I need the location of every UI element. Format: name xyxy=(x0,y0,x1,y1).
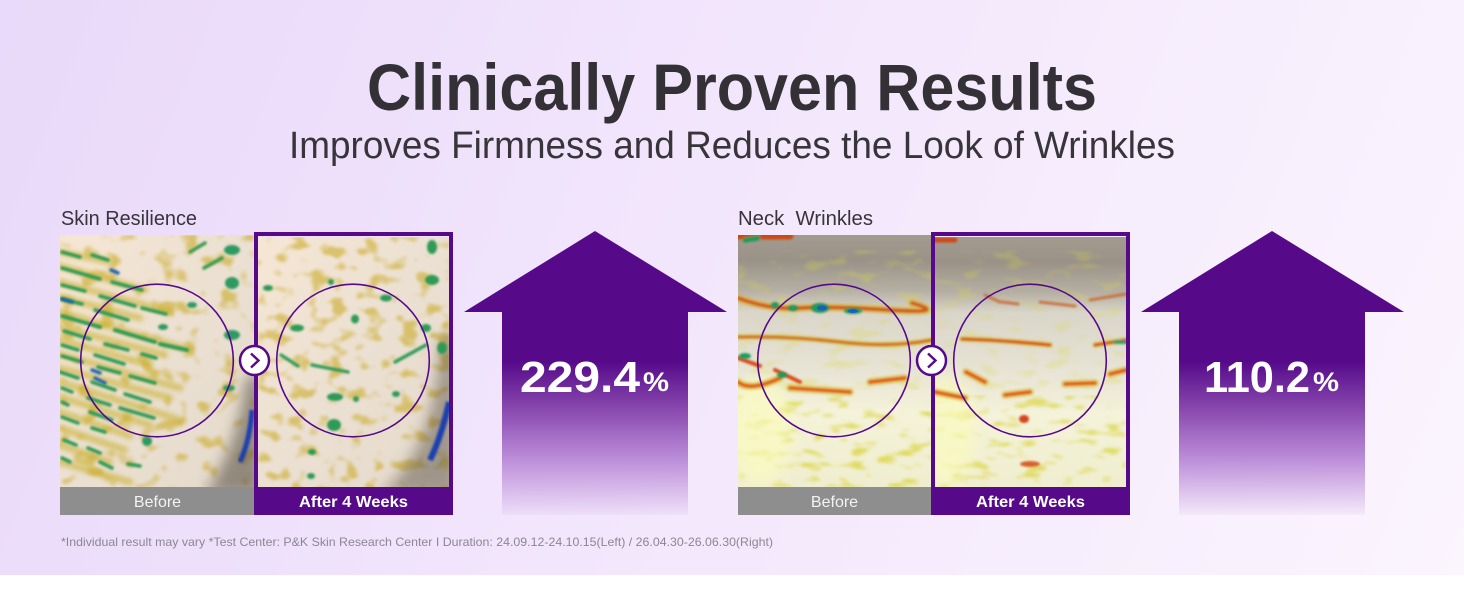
panel: neck wrinkles xyxy=(728,207,1404,515)
image: skin resilience after xyxy=(258,237,458,495)
after frame: After 4 Weeks xyxy=(976,494,1085,511)
heading: neck wrinkles: Neck Wrinkles xyxy=(738,207,873,230)
image: neck wrinkles after xyxy=(935,237,1126,487)
before label bar: Before xyxy=(811,494,858,511)
heading: skin resilience: Skin Resilience xyxy=(61,207,197,230)
arrow: 110.2 percent: % xyxy=(1313,367,1339,397)
image: neck wrinkles before xyxy=(728,235,932,487)
image: skin resilience before xyxy=(60,235,262,495)
arrow: 110.2 percent: 110.2 xyxy=(1204,353,1310,402)
title: Clinically Proven Results xyxy=(367,50,1097,124)
before label bar: Before xyxy=(134,494,181,511)
icon: chevron button xyxy=(917,346,946,375)
subtitle: Improves Firmness and Reduces the Look of Wrinkles xyxy=(289,125,1175,167)
arrow: 110.2 percent xyxy=(1141,231,1404,515)
icon: chevron button xyxy=(240,346,269,375)
after frame: After 4 Weeks xyxy=(299,494,408,511)
footnote: *Individual result may vary *Test Center: P&K Skin Research Center I Duration: 24.09.12-24.10.15(Left) / 26.04.30-26.06.30(Right) xyxy=(61,535,773,549)
circle: after highlight xyxy=(954,284,1106,437)
arrow: 229.4 percent: % xyxy=(643,367,669,397)
circle: before highlight xyxy=(758,284,910,437)
circle: after highlight xyxy=(277,284,429,437)
after frame xyxy=(931,234,1130,515)
after frame xyxy=(254,234,453,515)
circle: before highlight xyxy=(81,284,233,437)
arrow: 229.4 percent: 229.4 xyxy=(520,353,641,402)
panel: skin resilience xyxy=(60,207,727,515)
arrow: 229.4 percent xyxy=(464,231,727,515)
before label bar xyxy=(60,487,254,515)
before label bar xyxy=(738,487,932,515)
